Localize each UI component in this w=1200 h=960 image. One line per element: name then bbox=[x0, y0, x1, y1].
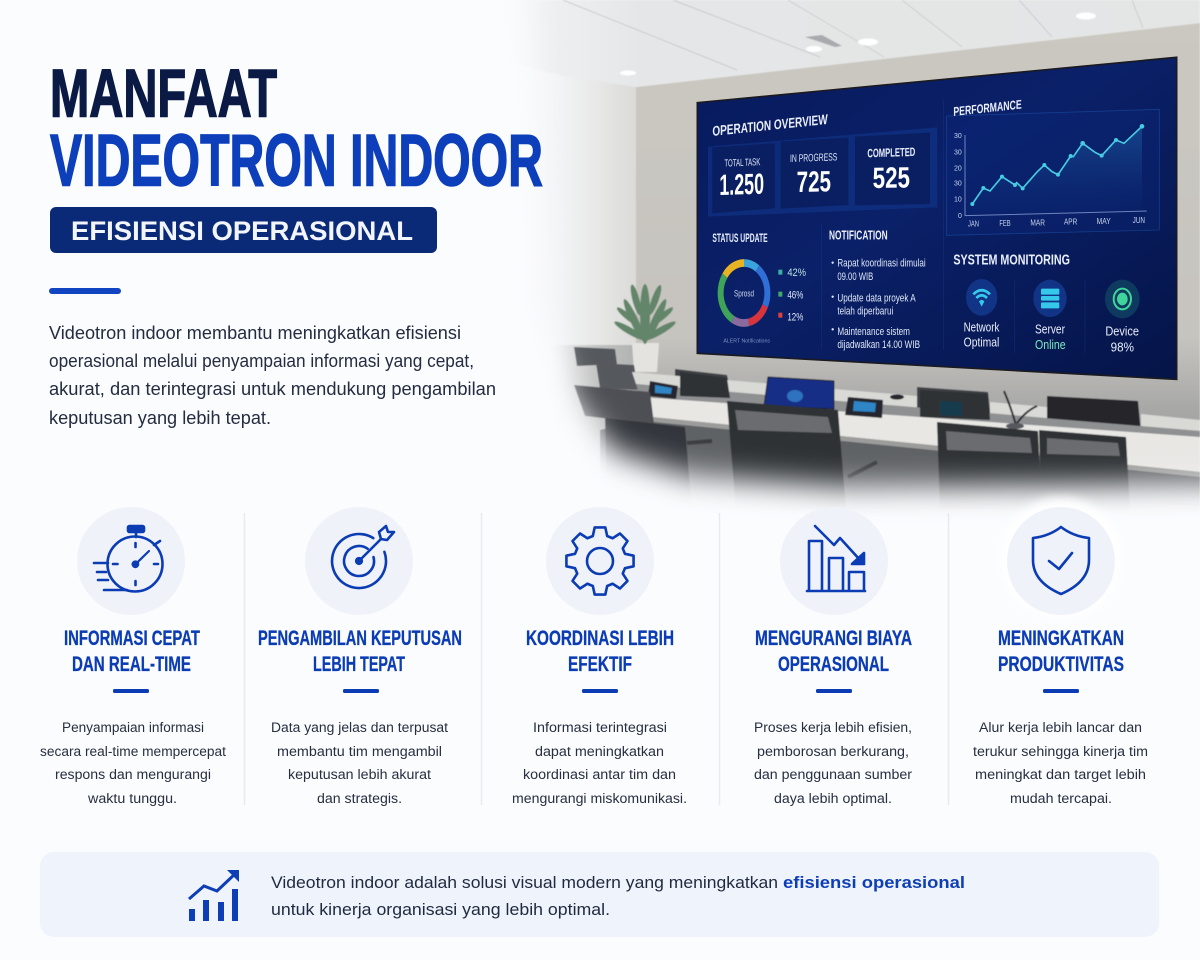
icon: gear bbox=[566, 527, 634, 595]
notification list bbox=[831, 258, 926, 351]
server label bbox=[1035, 322, 1066, 352]
overview KPI panel bbox=[708, 127, 937, 217]
title block bbox=[50, 56, 543, 202]
notification list: dijadwalkan 14.00 WIB bbox=[837, 339, 920, 351]
ceiling bbox=[500, 0, 1200, 87]
icon circle bbox=[305, 507, 413, 615]
chair right 1 bbox=[936, 422, 1041, 500]
laptop logo bbox=[787, 390, 803, 402]
notification heading: NOTIFICATION bbox=[829, 228, 888, 242]
underline bbox=[816, 689, 852, 693]
heading: EFEKTIF bbox=[568, 653, 632, 676]
notification panel bbox=[829, 228, 926, 351]
back chairs bbox=[574, 347, 1141, 433]
left wall with window bbox=[554, 74, 636, 346]
benefit 2: pengambilan keputusan bbox=[258, 507, 462, 806]
icon: server bbox=[1033, 280, 1067, 317]
description: dapat meningkatkan bbox=[535, 744, 664, 759]
floor bbox=[600, 422, 1200, 501]
heading bbox=[258, 627, 462, 676]
notification list: Maintenance sistem bbox=[837, 326, 910, 338]
description: koordinasi antar tim dan bbox=[523, 767, 676, 782]
description bbox=[973, 720, 1148, 806]
description: mudah tercapai. bbox=[1010, 791, 1112, 806]
heading: LEBIH TEPAT bbox=[313, 653, 405, 676]
description: Proses kerja lebih efisien, bbox=[754, 720, 912, 735]
gap under back table bbox=[636, 384, 1200, 440]
overview background bbox=[708, 127, 937, 217]
donut caption: ALERT Notifications bbox=[723, 339, 770, 345]
heading: INFORMASI CEPAT bbox=[64, 627, 200, 650]
benefit 5: produktivitas bbox=[973, 498, 1148, 806]
description: keputusan lebih akurat bbox=[288, 767, 431, 782]
laptop bbox=[764, 377, 834, 409]
description: waktu tunggu. bbox=[87, 791, 177, 806]
pot bbox=[632, 343, 659, 372]
plant bbox=[613, 284, 677, 372]
room: ceiling, walls, furniture bbox=[500, 0, 1200, 530]
y axis labels: 0 bbox=[958, 213, 962, 220]
description: dan penggunaan sumber bbox=[754, 767, 913, 782]
chart axes bbox=[965, 135, 1147, 216]
front chairs bbox=[574, 385, 1130, 510]
description: terukur sehingga kinerja tim bbox=[973, 744, 1148, 759]
description: dan strategis. bbox=[317, 791, 402, 806]
donut legend bbox=[778, 267, 806, 324]
device label: 98% bbox=[1111, 340, 1134, 355]
heading bbox=[526, 627, 674, 676]
chair arms bbox=[687, 441, 877, 477]
operation overview heading: OPERATION OVERVIEW bbox=[712, 111, 828, 139]
subtitle badge bbox=[50, 207, 437, 253]
ceiling lights bbox=[620, 12, 1096, 76]
banner text bbox=[271, 873, 965, 919]
panel dividers bbox=[822, 100, 1085, 353]
description bbox=[271, 720, 448, 806]
videotron screen bbox=[697, 57, 1177, 379]
notification list: Update data proyek A bbox=[837, 292, 916, 304]
description: Alur kerja lebih lancar dan bbox=[979, 720, 1142, 735]
banner text: efisiensi operasional bbox=[783, 873, 965, 892]
x axis labels: APR bbox=[1064, 217, 1078, 226]
status update panel bbox=[712, 232, 806, 345]
underline bbox=[343, 689, 379, 693]
heading: PENGAMBILAN KEPUTUSAN bbox=[258, 627, 462, 650]
screen frame bbox=[697, 57, 1177, 379]
x axis labels: JUN bbox=[1133, 216, 1145, 225]
network label: Network bbox=[964, 321, 1000, 335]
completed card: 525 bbox=[873, 161, 910, 195]
status heading: STATUS UPDATE bbox=[712, 232, 768, 245]
data points bbox=[970, 124, 1144, 206]
title line: VIDEOTRON INDOOR: VIDEOTRON INDOOR bbox=[50, 120, 543, 202]
hero photo: meeting room with videotron bbox=[536, 0, 1200, 510]
description: Penyampaian informasi bbox=[62, 720, 204, 735]
description: respons dan mengurangi bbox=[55, 767, 211, 782]
icon: falling bar chart bbox=[807, 526, 865, 591]
heading: MENGURANGI BIAYA bbox=[755, 627, 912, 650]
icon: rising chart bbox=[189, 870, 239, 921]
laptop screen bbox=[764, 377, 834, 409]
subtitle badge: EFISIENSI OPERASIONAL bbox=[71, 216, 413, 246]
circle halo bbox=[1001, 498, 1121, 618]
back table bbox=[632, 372, 917, 408]
completed card: COMPLETED bbox=[867, 145, 916, 160]
completed card bbox=[855, 133, 930, 205]
description: mengurangi miskomunikasi. bbox=[512, 791, 687, 806]
description bbox=[512, 720, 687, 806]
summary banner bbox=[40, 852, 1159, 937]
mic base bbox=[1006, 423, 1024, 429]
description: meningkat dan target lebih bbox=[975, 767, 1146, 782]
y axis labels: 30 bbox=[954, 133, 962, 140]
notification list: telah diperbarui bbox=[837, 306, 893, 318]
performance chart panel bbox=[947, 98, 1159, 235]
intro paragraph: akurat, dan terintegrasi untuk mendukung pengambilan bbox=[49, 379, 496, 399]
donut chart bbox=[721, 263, 767, 323]
underline bbox=[582, 689, 618, 693]
description: membantu tim mengambil bbox=[277, 744, 442, 759]
donut legend: 46% bbox=[787, 290, 804, 302]
server label: Online bbox=[1035, 338, 1066, 352]
benefit 3: koordinasi bbox=[512, 507, 687, 806]
icon circle bbox=[1007, 507, 1115, 615]
notification list: 09.00 WIB bbox=[837, 271, 873, 283]
title line: MANFAAT: MANFAAT bbox=[50, 56, 277, 132]
front table bbox=[640, 397, 1200, 472]
system monitoring heading: SYSTEM MONITORING bbox=[953, 253, 1070, 269]
x axis labels: JAN bbox=[968, 220, 979, 229]
description: daya lebih optimal. bbox=[774, 791, 892, 806]
x axis labels: MAR bbox=[1030, 218, 1045, 227]
donut legend: 12% bbox=[787, 312, 804, 324]
description: pemborosan berkurang, bbox=[757, 744, 909, 759]
microphone bbox=[1004, 391, 1037, 425]
system monitoring panel bbox=[953, 253, 1140, 355]
underline bbox=[113, 689, 149, 693]
chair left bbox=[574, 385, 654, 424]
description: Data yang jelas dan terpusat bbox=[271, 720, 448, 735]
icon circle bbox=[780, 507, 888, 615]
underline bbox=[1043, 689, 1079, 693]
icon: wifi bbox=[966, 279, 997, 316]
in progress card: 725 bbox=[797, 165, 831, 199]
ceiling grid lines bbox=[563, 0, 1143, 70]
heading: KOORDINASI LEBIH bbox=[526, 627, 674, 650]
in progress card: IN PROGRESS bbox=[790, 151, 837, 165]
donut label: Sprosd bbox=[734, 289, 754, 299]
leaves bbox=[613, 284, 677, 344]
total task card: 1.250 bbox=[719, 168, 764, 202]
icon circle bbox=[77, 507, 185, 615]
banner background bbox=[40, 852, 1159, 937]
performance heading: PERFORMANCE bbox=[953, 98, 1022, 119]
y axis labels: 30 bbox=[954, 181, 962, 188]
heading bbox=[998, 627, 1124, 676]
column dividers bbox=[244, 513, 948, 805]
heading bbox=[755, 627, 912, 676]
total task card bbox=[712, 143, 775, 213]
mouse bbox=[890, 394, 904, 400]
total task card: TOTAL TASK bbox=[724, 157, 760, 170]
accent bar bbox=[49, 288, 121, 294]
y axis labels: 30 bbox=[954, 149, 962, 156]
banner text: untuk kinerja organisasi yang lebih optimal. bbox=[271, 900, 610, 919]
y axis labels bbox=[954, 133, 962, 220]
x axis labels: MAY bbox=[1097, 217, 1111, 226]
intro paragraph: operasional melalui penyampaian informasi yang cepat, bbox=[49, 351, 474, 371]
description bbox=[754, 720, 913, 806]
donut legend: 42% bbox=[787, 267, 806, 279]
lower left wall shadow bbox=[562, 344, 636, 449]
description: Informasi terintegrasi bbox=[533, 720, 667, 735]
heading bbox=[64, 627, 200, 676]
benefit 4: mengurangi biaya bbox=[754, 507, 913, 806]
banner text: Videotron indoor adalah solusi visual modern yang meningkatkan bbox=[271, 873, 778, 892]
right wall bbox=[636, 22, 1200, 430]
tablets on table bbox=[648, 381, 962, 418]
chair right 2 bbox=[1038, 430, 1129, 499]
device label: Device bbox=[1105, 324, 1139, 339]
intro paragraph: Videotron indoor membantu meningkatkan efisiensi bbox=[49, 323, 461, 343]
server label: Server bbox=[1035, 322, 1065, 336]
line series bbox=[972, 126, 1142, 204]
description: secara real-time mempercepat bbox=[40, 744, 226, 759]
heading: MENINGKATKAN bbox=[998, 627, 1124, 650]
intro paragraph bbox=[49, 323, 496, 428]
y axis labels: 10 bbox=[954, 197, 962, 204]
intro paragraph: keputusan yang lebih tepat. bbox=[49, 408, 271, 428]
heading: OPERASIONAL bbox=[778, 653, 889, 676]
network label bbox=[964, 321, 1000, 350]
photo fade to page background bbox=[300, 0, 1200, 700]
ceiling vent bbox=[805, 35, 842, 47]
chair centre bbox=[727, 401, 846, 510]
icon: shield check bbox=[1033, 527, 1089, 594]
heading: PRODUKTIVITAS bbox=[998, 653, 1124, 676]
description bbox=[40, 720, 226, 806]
in progress card bbox=[781, 138, 848, 209]
icon: target with arrow bbox=[332, 526, 394, 588]
x axis labels: FEB bbox=[999, 219, 1011, 228]
network label: Optimal bbox=[964, 336, 999, 350]
notification list: Rapat koordinasi dimulai bbox=[837, 258, 926, 270]
icon: stopwatch bbox=[94, 526, 162, 592]
chart area bbox=[972, 126, 1142, 215]
back chair screens bbox=[680, 372, 990, 420]
icon: device bbox=[1105, 280, 1140, 318]
x axis labels bbox=[968, 216, 1145, 229]
benefit 1: informasi cepat bbox=[40, 507, 226, 806]
icon circle bbox=[546, 507, 654, 615]
device label bbox=[1105, 324, 1139, 355]
y axis labels: 20 bbox=[954, 166, 962, 173]
heading: DAN REAL-TIME bbox=[72, 653, 191, 676]
chart frame bbox=[947, 109, 1159, 235]
